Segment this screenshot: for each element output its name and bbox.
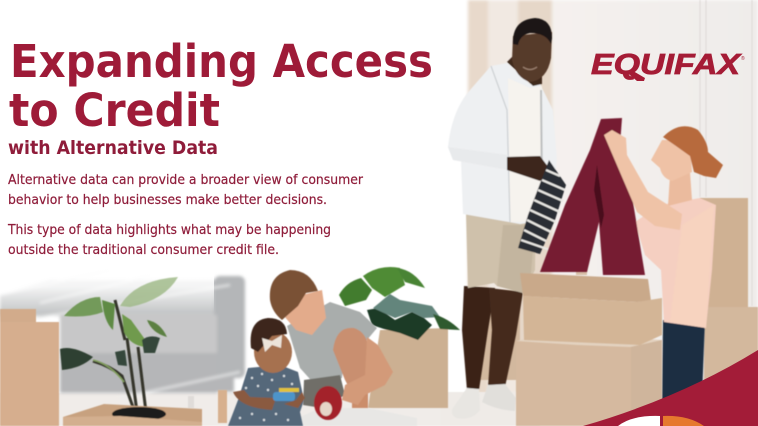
- intro paragraph 1: behavior to help businesses make better decisions.: [8, 192, 327, 208]
- woman arm: [604, 130, 682, 230]
- plant leaves: [339, 267, 460, 340]
- sofa under plastic: [0, 270, 245, 398]
- woman shirt: [635, 198, 716, 328]
- tape dispenser: [314, 386, 342, 420]
- tall box at left edge: [0, 309, 59, 426]
- boy limbs: [333, 328, 370, 393]
- pie chart fragment: [618, 416, 704, 426]
- open box: [520, 273, 662, 345]
- title: [9, 35, 433, 137]
- maroon garment: [540, 118, 645, 275]
- plant box: [368, 328, 448, 408]
- intro paragraph 1: Alternative data can provide a broader view of consumer: [8, 172, 363, 188]
- lower box: [516, 336, 662, 426]
- baby: [228, 318, 305, 426]
- man legs and socks: [452, 286, 523, 419]
- man head: [507, 18, 552, 86]
- fade over top of sofa: [0, 262, 214, 312]
- sofa leg and floor detail: [188, 390, 227, 423]
- man standing: [448, 18, 566, 419]
- subtitle: with Alternative Data: [8, 137, 218, 159]
- boy head: [270, 270, 326, 335]
- plastic storage bin: [298, 408, 417, 426]
- left cardboard boxes: [0, 309, 202, 426]
- man shorts: [466, 212, 536, 293]
- Equifax logo: EQUIFAX: [591, 49, 742, 81]
- striped garment: [518, 160, 566, 254]
- baby head: [251, 318, 292, 373]
- baby arms and toy: [233, 390, 276, 410]
- boy: [270, 270, 393, 420]
- man arm: [507, 156, 552, 181]
- intro paragraph 2: This type of data highlights what may be happening: [7, 222, 331, 238]
- woman head: [651, 126, 723, 181]
- title: Expanding Access: [10, 35, 433, 88]
- left plant: [60, 277, 178, 412]
- man shirt: [448, 63, 557, 224]
- right plant in box: [339, 267, 460, 408]
- maroon swoosh corner: [583, 350, 758, 426]
- front cardboard boxes: [516, 273, 662, 426]
- boy shirt and shorts: [287, 302, 377, 388]
- woman neck: [668, 172, 692, 206]
- plant box at bottom: [63, 404, 202, 426]
- intro paragraph 1: [8, 172, 363, 208]
- intro paragraph 2: outside the traditional consumer credit file.: [8, 242, 279, 258]
- title: to Credit: [9, 84, 220, 137]
- woman with garment: [540, 118, 723, 404]
- Equifax logo: ®: [741, 55, 745, 62]
- baby dress: [228, 365, 304, 426]
- boy arm: [342, 337, 393, 405]
- intro paragraph 2: [7, 222, 331, 258]
- back cardboard boxes: [478, 198, 758, 385]
- woman jeans: [662, 320, 705, 404]
